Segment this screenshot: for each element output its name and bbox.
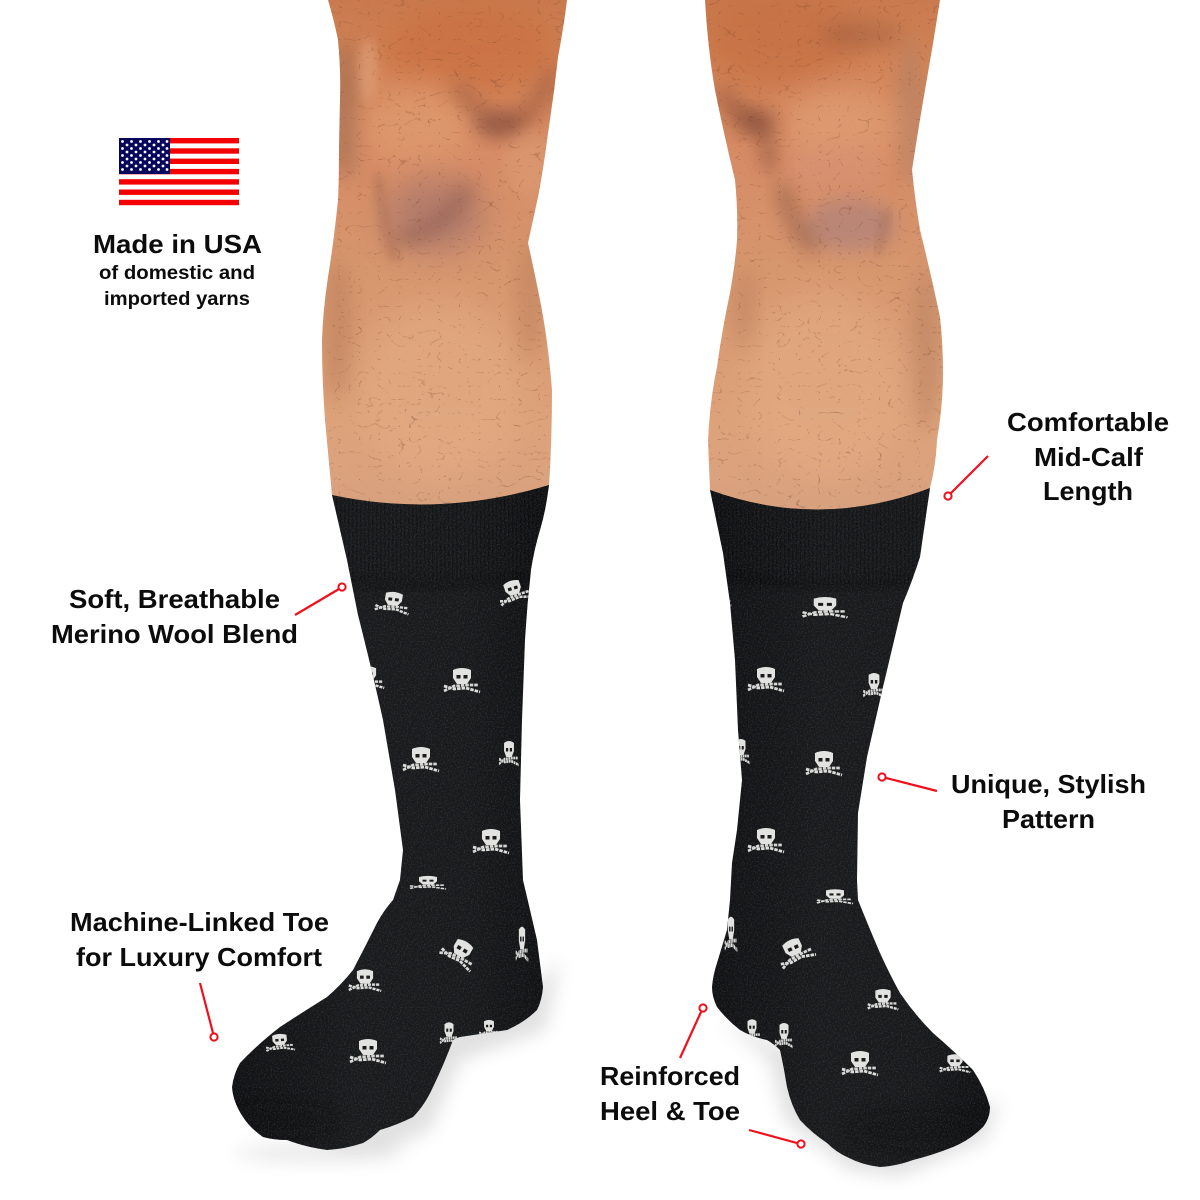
left sock skull pattern xyxy=(265,576,532,1063)
callout: machine-linked toe: Machine-Linked Toe xyxy=(70,907,329,937)
right sock xyxy=(705,480,995,1170)
callout: mid-calf length xyxy=(944,407,1169,506)
icon: US flag xyxy=(119,138,239,205)
callout: reinforced heel and toe: Heel & Toe xyxy=(600,1096,740,1126)
callout: mid-calf length: Length xyxy=(1043,476,1133,506)
callout: reinforced heel and toe xyxy=(600,1004,805,1148)
right knee lighting xyxy=(706,2,942,426)
callout: stylish pattern: Pattern xyxy=(1002,804,1095,834)
right sock skull pattern xyxy=(717,589,970,1075)
callout: reinforced heel and toe: Reinforced xyxy=(600,1061,740,1091)
text: made in USA xyxy=(93,229,262,310)
callout: stylish pattern xyxy=(878,769,1146,834)
callout: machine-linked toe xyxy=(70,907,329,1041)
callout: merino wool blend: Merino Wool Blend xyxy=(51,619,298,649)
left leg xyxy=(318,0,570,535)
left knee lighting xyxy=(322,12,562,395)
callout: merino wool blend: Soft, Breathable xyxy=(69,584,280,614)
callout: stylish pattern: Unique, Stylish xyxy=(951,769,1146,799)
floor shadow under feet xyxy=(235,960,1000,1176)
callout: machine-linked toe: for Luxury Comfort xyxy=(76,942,322,972)
left sock xyxy=(215,480,555,1160)
text: made in USA: imported yarns xyxy=(104,289,250,310)
right leg xyxy=(700,0,950,535)
callout: merino wool blend xyxy=(51,583,346,649)
callout: mid-calf length: Comfortable xyxy=(1007,407,1169,437)
text: made in USA: of domestic and xyxy=(99,263,255,284)
callout: mid-calf length: Mid-Calf xyxy=(1034,442,1143,472)
text: made in USA: Made in USA xyxy=(93,229,262,259)
